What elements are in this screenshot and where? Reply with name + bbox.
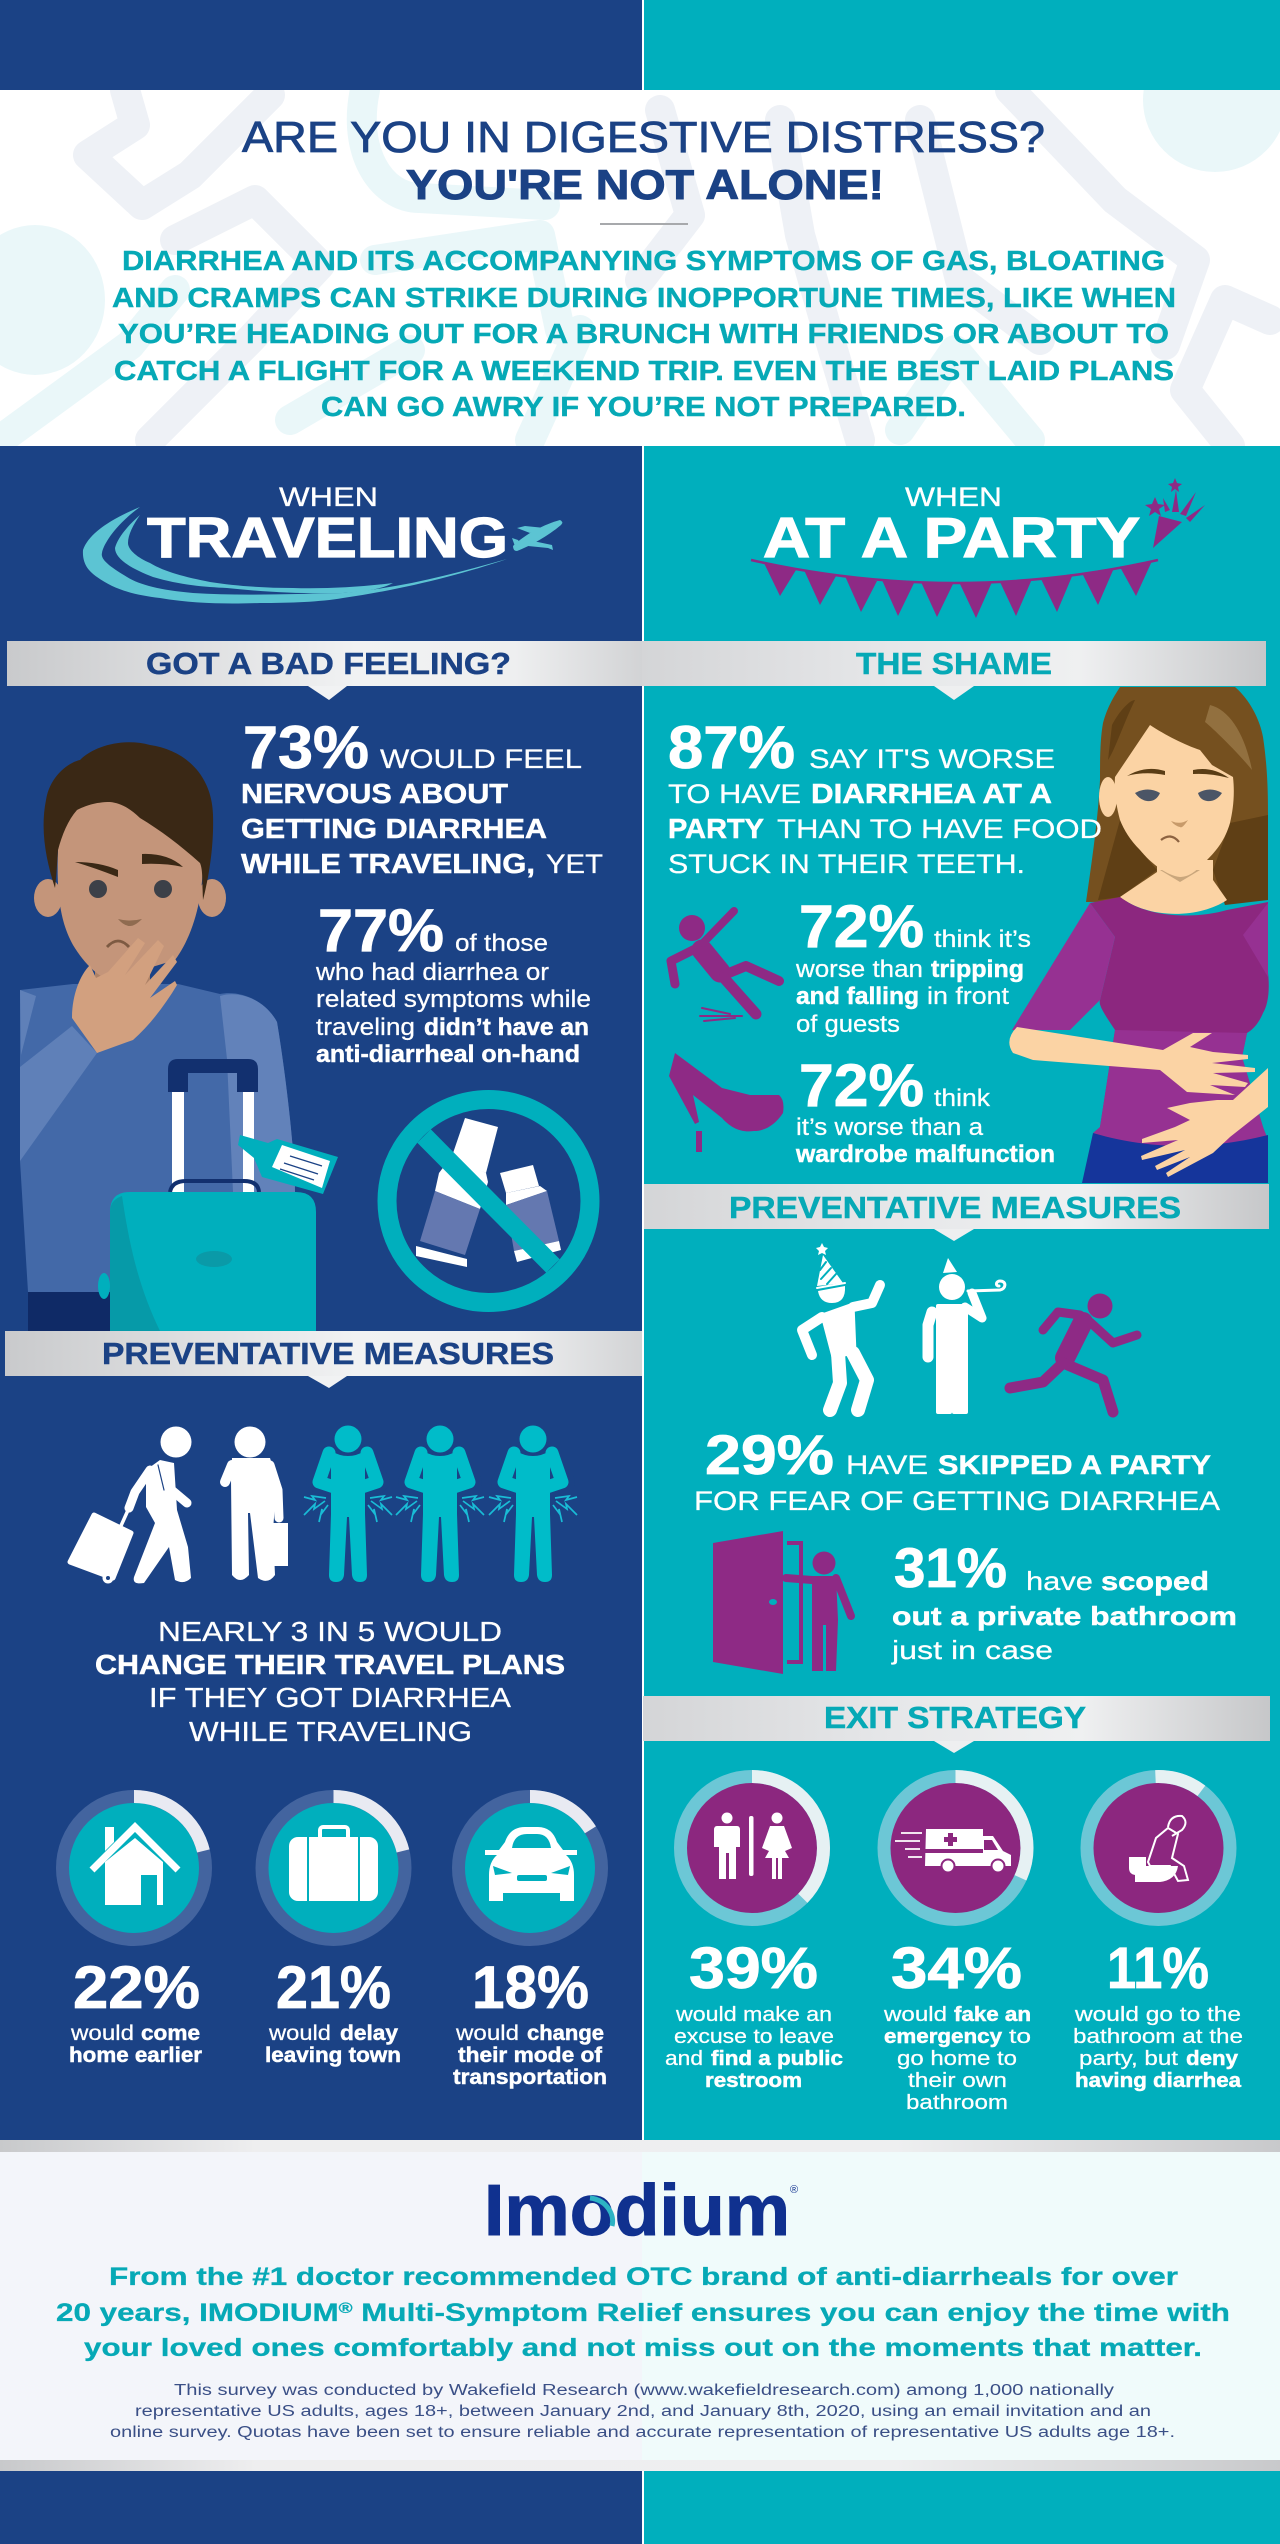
stat: 21% delay leaving: leaving town — [265, 2044, 401, 2067]
heading: when traveling: WHEN — [279, 482, 378, 512]
stat: 31% scoped: just in case — [891, 1635, 1053, 1665]
stat: 73% nervous: YET — [546, 849, 603, 879]
stat: 77% no anti-diarrheal: who had diarrhea or — [315, 959, 549, 986]
stat: 77% no anti-diarrheal: related symptoms while — [316, 986, 591, 1013]
stat: 34% fake emergency: go home to — [897, 2048, 1017, 2070]
icon: three cramping figures — [304, 1424, 577, 1582]
intro paragraph: DIARRHEA AND ITS ACCOMPANYING SYMPTOMS OF GAS, BLOATING — [122, 245, 1165, 276]
stat: 72% tripping: and falling — [796, 983, 919, 1010]
stat: 73% nervous: NERVOUS ABOUT — [241, 778, 508, 809]
stat: 87% worse — [668, 714, 1102, 879]
stat: 31% scoped: out a private bathroom — [892, 1601, 1237, 1631]
stat: 11% deny: deny — [1186, 2048, 1239, 2070]
stat: 77% no anti-diarrheal: 77% — [318, 897, 444, 964]
stat: 87% worse: SAY IT'S WORSE — [809, 744, 1055, 774]
icon: broken high heel — [669, 1053, 784, 1152]
logo: Imodium: Imodium — [484, 2171, 790, 2251]
stat: 72% tripping: in front — [927, 983, 1009, 1010]
stat: nearly 3 in 5 — [95, 1616, 565, 1747]
stat: nearly 3 in 5: WHILE TRAVELING — [189, 1716, 472, 1747]
section banner: the shame — [642, 641, 1266, 700]
stat: 72% wardrobe: it’s worse than a — [796, 1114, 984, 1141]
stat: 31% scoped: scoped — [1101, 1566, 1209, 1596]
stat: 29% skipped: HAVE — [846, 1450, 928, 1480]
illustration: worried man with suitcase — [20, 742, 338, 1331]
stat: nearly 3 in 5: NEARLY 3 IN 5 WOULD — [158, 1616, 502, 1647]
disclaimer — [110, 2382, 1175, 2441]
top band — [0, 0, 1280, 90]
stat: 34% fake emergency: bathroom — [906, 2092, 1008, 2114]
section banner: preventative measures left: PREVENTATIVE MEASURES — [102, 1336, 554, 1371]
stat: 73% nervous: 73% — [243, 714, 369, 781]
section banner: preventative measures left — [5, 1331, 642, 1388]
stat: 22% come home earlier — [62, 1796, 206, 2067]
tagline: your loved ones comfortably and not miss out on the moments that matter. — [84, 2334, 1202, 2362]
stat: 72% wardrobe — [795, 1052, 1055, 1168]
tagline: Multi-Symptom Relief ensures you can enjoy the time with — [353, 2299, 1230, 2327]
bottom band — [0, 2471, 1280, 2544]
stat: 77% no anti-diarrheal: traveling — [316, 1014, 415, 1041]
icon: swoosh — [83, 507, 507, 603]
stat: 18% change mode: change — [527, 2022, 604, 2045]
icon: house ring — [62, 1796, 206, 1940]
stat: 87% worse: 87% — [668, 714, 795, 781]
stat: 11% deny: party, but — [1079, 2048, 1179, 2070]
icon: ambulance ring — [884, 1776, 1027, 1920]
icon: party guest with hat — [802, 1243, 880, 1410]
stat: 22% come home earlier: come — [141, 2022, 200, 2045]
stat: 72% wardrobe: wardrobe malfunction — [795, 1141, 1055, 1168]
stat: 72% wardrobe: think — [934, 1085, 991, 1112]
heading: when at a party: AT A PARTY — [763, 506, 1140, 570]
stat: 29% skipped — [694, 1423, 1220, 1516]
stat: 29% skipped: FOR FEAR OF GETTING DIARRHEA — [694, 1486, 1220, 1516]
stat: 72% tripping: of guests — [796, 1011, 900, 1038]
icon: party guest with blower — [928, 1258, 1005, 1412]
icon: car ring — [458, 1796, 602, 1940]
stat: 31% scoped: have — [1026, 1566, 1093, 1596]
tagline: ® — [339, 2300, 353, 2317]
section banner: preventative measures right — [644, 1184, 1269, 1241]
intro paragraph — [112, 245, 1176, 422]
section banner: the shame: THE SHAME — [856, 646, 1052, 681]
stat: 34% fake emergency — [883, 1776, 1031, 2114]
title: YOU'RE NOT ALONE! — [406, 161, 884, 208]
panel: traveling background — [0, 446, 642, 2140]
stat: 22% come home earlier: home earlier — [69, 2044, 202, 2067]
stat: 77% no anti-diarrheal: didn’t have an — [424, 1014, 589, 1041]
section banner: got a bad feeling: GOT A BAD FEELING? — [146, 646, 511, 681]
stat: 73% nervous — [241, 714, 603, 879]
icon row: 3 in 5 travelers — [70, 1424, 577, 1584]
stat: 29% skipped: SKIPPED A PARTY — [938, 1450, 1211, 1480]
stat: 18% change mode: their mode of — [458, 2044, 603, 2067]
stat: 31% scoped: 31% — [894, 1536, 1007, 1599]
stat: 72% wardrobe: 72% — [799, 1052, 924, 1119]
tagline — [56, 2263, 1230, 2362]
stat: 73% nervous: WOULD FEEL — [380, 744, 582, 774]
disclaimer: representative US adults, ages 18+, between January 2nd, and January 8th, 2020, using an email invitation and an — [135, 2403, 1151, 2420]
header panel background — [0, 90, 1280, 446]
stat: 18% change mode — [453, 1796, 607, 2089]
intro paragraph: AND CRAMPS CAN STRIKE DURING INOPPORTUNE TIMES, LIKE WHEN — [112, 282, 1176, 313]
intro paragraph: YOU’RE HEADING OUT FOR A BRUNCH WITH FRIENDS OR ABOUT TO — [118, 318, 1169, 349]
stat: 72% tripping — [795, 893, 1031, 1038]
stat: 21% delay leaving: 21% — [276, 1954, 391, 2021]
illustration: woman holding stomach — [1009, 687, 1269, 1183]
stat: nearly 3 in 5: CHANGE THEIR TRAVEL PLANS — [95, 1649, 565, 1680]
stat: 87% worse: TO HAVE — [668, 779, 801, 809]
stat: 18% change mode: 18% — [472, 1954, 589, 2021]
stat: 34% fake emergency: their own — [908, 2070, 1007, 2092]
section banner: got a bad feeling — [7, 641, 642, 700]
stat: 11% deny — [1073, 1776, 1243, 2092]
stat: 73% nervous: GETTING DIARRHEA — [241, 813, 547, 844]
icon: walking traveler — [70, 1426, 192, 1584]
stat: 11% deny: bathroom at the — [1073, 2026, 1243, 2048]
stat: 31% scoped — [891, 1536, 1237, 1665]
stat: 34% fake emergency: fake an — [954, 2004, 1031, 2026]
stat: 22% come home earlier: would — [70, 2022, 134, 2045]
intro paragraph: CATCH A FLIGHT FOR A WEEKEND TRIP. EVEN THE BEST LAID PLANS — [114, 355, 1174, 386]
stat: 73% nervous: WHILE TRAVELING, — [241, 848, 535, 879]
section banner: preventative measures right: PREVENTATIVE MEASURES — [729, 1190, 1181, 1225]
stat: 34% fake emergency: would — [883, 2004, 947, 2026]
icon: no medicine bottles — [387, 1100, 590, 1302]
stat: 72% tripping: worse than — [795, 956, 923, 983]
stat: 39% excuse: restroom — [705, 2070, 802, 2092]
icon: standing traveler — [225, 1426, 288, 1581]
stat: 39% excuse: would make an — [675, 2004, 832, 2026]
stat: 21% delay leaving: delay — [340, 2022, 398, 2045]
stat: 87% worse: THAN TO HAVE FOOD — [777, 814, 1102, 844]
heading: when at a party — [751, 478, 1205, 618]
icon: running figure — [1010, 1294, 1137, 1412]
stat: 39% excuse — [665, 1776, 843, 2092]
footer panel background — [0, 2140, 1280, 2471]
disclaimer: This survey was conducted by Wakefield Research (www.wakefieldresearch.com) among 1,000 nationally — [174, 2382, 1114, 2399]
stat: 39% excuse: and — [665, 2048, 703, 2070]
intro paragraph: CAN GO AWRY IF YOU’RE NOT PREPARED. — [321, 391, 966, 422]
icon: person falling — [671, 911, 779, 1021]
stat: 72% tripping: 72% — [799, 893, 924, 960]
title: ARE YOU IN DIGESTIVE DISTRESS? — [242, 113, 1045, 162]
stat: 72% tripping: think it’s — [934, 926, 1031, 953]
tagline: 20 years, IMODIUM — [56, 2299, 281, 2327]
disclaimer: online survey. Quotas have been set to ensure reliable and accurate representation of representative US adults age 18+. — [110, 2424, 1175, 2441]
stat: 39% excuse: 39% — [689, 1936, 818, 2001]
logo: Imodium: ® — [790, 2184, 798, 2196]
stat: 87% worse: DIARRHEA AT A — [811, 778, 1052, 809]
stat: 22% come home earlier: 22% — [73, 1954, 200, 2021]
icon: party popper — [1145, 478, 1205, 548]
stat: 21% delay leaving — [262, 1796, 405, 2067]
icon: plane — [512, 520, 562, 551]
stat: 87% worse: PARTY — [668, 813, 764, 844]
stat: 39% excuse: excuse to leave — [674, 2026, 834, 2048]
icon: suitcase ring — [262, 1796, 405, 1940]
section banner: exit strategy: EXIT STRATEGY — [824, 1700, 1086, 1735]
stat: 18% change mode: transportation — [453, 2066, 607, 2089]
tagline: From the #1 doctor recommended OTC brand of anti-diarrheals for over — [109, 2263, 1178, 2291]
heading: when traveling: TRAVELING — [147, 506, 508, 570]
stat: 77% no anti-diarrheal: of those — [455, 930, 548, 957]
stat: 87% worse: STUCK IN THEIR TEETH. — [668, 849, 1025, 879]
title — [242, 113, 1045, 208]
stat: 77% no anti-diarrheal: anti-diarrheal on-hand — [316, 1041, 580, 1068]
stat: 11% deny: would go to the — [1074, 2004, 1241, 2026]
stat: 21% delay leaving: would — [268, 2022, 331, 2045]
stat: 11% deny: 11% — [1107, 1936, 1209, 2001]
heading: when traveling — [83, 482, 562, 603]
stat: 77% no anti-diarrheal — [315, 897, 591, 1068]
panel: party background — [644, 446, 1280, 2140]
stat: 34% fake emergency: to — [1009, 2026, 1031, 2048]
icon: toilet ring — [1087, 1776, 1230, 1920]
stat: 39% excuse: find a public — [711, 2048, 843, 2070]
heading: when at a party: WHEN — [905, 482, 1002, 512]
stat: 18% change mode: would — [455, 2022, 519, 2045]
icon: person at door — [713, 1531, 851, 1674]
section banner: exit strategy — [643, 1696, 1270, 1753]
stat: 34% fake emergency: 34% — [891, 1936, 1022, 2001]
stat: 11% deny: having diarrhea — [1075, 2070, 1242, 2092]
stat: 29% skipped: 29% — [705, 1423, 834, 1486]
stat: 72% tripping: tripping — [931, 956, 1024, 983]
icon: restroom ring — [680, 1776, 824, 1920]
stat: nearly 3 in 5: IF THEY GOT DIARRHEA — [149, 1682, 511, 1713]
stat: 34% fake emergency: emergency — [884, 2026, 1003, 2048]
icon: bunting — [751, 560, 1158, 618]
